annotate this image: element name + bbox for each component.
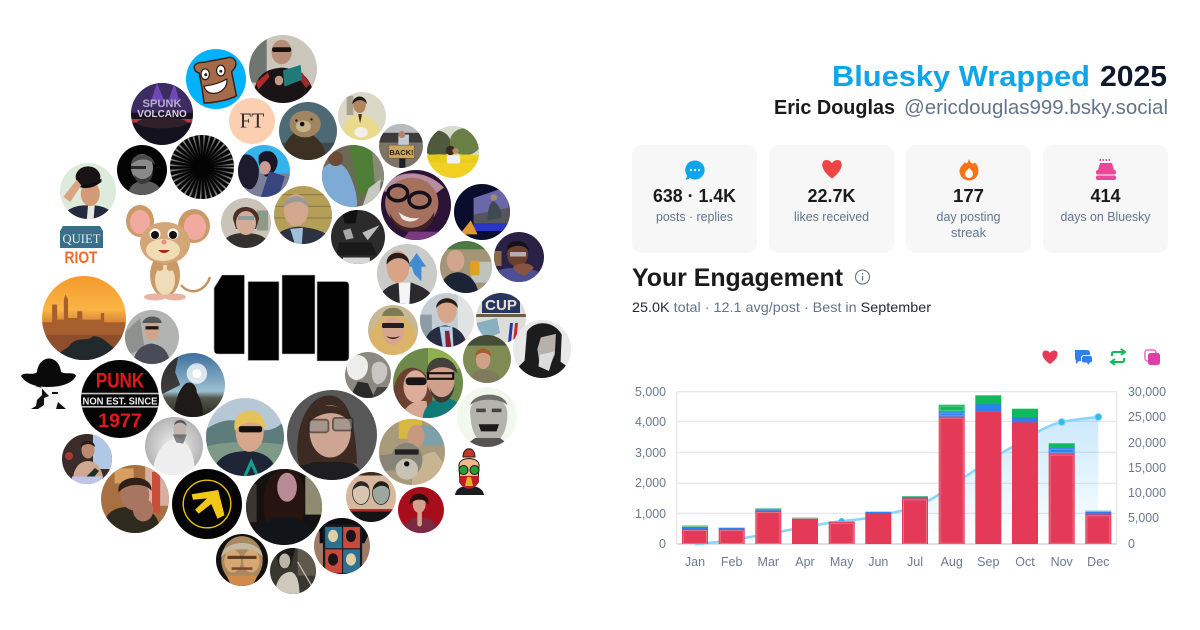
avatar: Punk badge: 1977	[98, 410, 142, 432]
icon: reposts arrows	[1111, 349, 1125, 365]
avatar: black starburst	[170, 135, 234, 199]
panel: stat posts and replies: 638 · 1.4K	[653, 186, 736, 206]
y axis left: 2,000	[635, 476, 666, 490]
heading: Bluesky Wrapped 2025: 2025	[1100, 61, 1167, 93]
avatar: shirt with portraits	[314, 518, 370, 574]
avatar: laughing curly-haired man	[101, 465, 169, 533]
x axis months: Feb	[721, 555, 743, 569]
avatar: Punk badge	[81, 360, 159, 438]
panel: avatar cluster	[21, 35, 571, 594]
x axis months: Jan	[685, 555, 705, 569]
avatar: two people on blue	[238, 145, 290, 197]
avatar: man with beer	[440, 241, 492, 293]
avatar: Spunk Volcano band	[131, 83, 193, 145]
y axis right	[1128, 385, 1166, 551]
avatar: man with hat drawing	[21, 358, 76, 409]
cumulative line	[695, 414, 1102, 544]
cumulative area	[695, 417, 1098, 544]
avatar: Quiet Riot logo	[60, 226, 103, 267]
heading: Bluesky Wrapped 2025: Bluesky Wrapped	[832, 61, 1090, 93]
avatar: smiling man with glasses	[381, 170, 451, 240]
bar: October	[1012, 409, 1038, 544]
x axis months: Nov	[1051, 555, 1074, 569]
y axis right: 5,000	[1128, 511, 1159, 525]
avatar: man in black and white	[117, 145, 167, 195]
x axis months	[685, 555, 1109, 569]
y axis right: 0	[1128, 537, 1135, 551]
panel: stat posting streak: 177	[953, 186, 984, 206]
avatar: Spunk Volcano band: VOLCANO	[137, 109, 187, 120]
icon: likes heart	[1042, 350, 1058, 364]
avatar: toast cartoon	[186, 49, 246, 109]
avatar: red masked character	[455, 449, 484, 495]
y axis right: 15,000	[1128, 461, 1166, 475]
avatar: man in white shirt	[145, 417, 203, 475]
panel: stat posting streak	[906, 145, 1031, 253]
panel: stat likes received: likes received	[794, 210, 869, 224]
avatar: Quiet Riot logo: RIOT	[64, 248, 98, 267]
bar: September	[975, 395, 1001, 544]
y axis right: 20,000	[1128, 436, 1166, 450]
avatar: protester with Back sign: BACK!	[389, 148, 413, 157]
bar: June	[865, 511, 891, 544]
avatar: man shouting in black and white	[457, 387, 517, 447]
bar: March	[755, 508, 781, 544]
bar: May	[829, 521, 855, 544]
avatar: man with red tie	[420, 293, 474, 347]
avatar: Aphex Twin logo	[172, 469, 242, 539]
avatar: silhouette with sun	[161, 353, 225, 417]
icon: flame	[960, 159, 978, 180]
avatar: bald man by brick wall	[274, 186, 332, 244]
avatar: sepia woman	[270, 548, 316, 594]
avatar: Spunk Volcano band: SPUNK	[142, 98, 182, 110]
avatar: black flag logo	[214, 275, 349, 361]
icon: quotes squares	[1145, 350, 1160, 365]
avatar: man in yellow robe	[338, 92, 386, 140]
avatar: woman with glasses large	[287, 390, 377, 480]
avatar: protester with Back sign	[379, 124, 423, 168]
y axis right: 30,000	[1128, 385, 1166, 399]
x axis months: Apr	[795, 555, 815, 569]
y axis left	[635, 385, 666, 551]
avatar: FT logo	[229, 98, 275, 144]
avatar: man reading book	[249, 35, 317, 103]
avatar: man in bathtub with bottle	[62, 434, 112, 484]
bar: December	[1085, 510, 1111, 544]
bar: January	[682, 525, 708, 544]
panel: stat posts and replies: posts · replies	[656, 210, 733, 224]
panel: stat likes received	[769, 145, 894, 253]
user name and handle: Eric Douglas	[774, 97, 895, 119]
avatar: CUP poster: CUP	[485, 297, 517, 314]
avatar: hooded bearded man	[513, 320, 571, 378]
bar: July	[902, 496, 928, 544]
engagement summary: 25.0K total · 12.1 avg/post · Best in September	[632, 299, 931, 315]
y axis left: 4,000	[635, 415, 666, 429]
bar: August	[939, 405, 965, 544]
panel: stat posting streak: day posting	[936, 210, 1001, 224]
x axis months: Jun	[868, 555, 888, 569]
panel: stat likes received: 22.7K	[808, 186, 856, 206]
avatar: Punk badge: PUNK	[96, 369, 144, 392]
avatar: mouse cartoon	[126, 205, 210, 300]
avatar: sea otter	[279, 102, 337, 160]
avatar: Quiet Riot logo: QUIET	[62, 231, 101, 246]
avatar: CUP poster	[476, 293, 526, 342]
avatar: blonde with sunglasses	[206, 398, 284, 476]
x axis months: Aug	[941, 555, 963, 569]
avatar: FT logo: FT	[240, 108, 264, 132]
user name and handle	[774, 97, 1168, 119]
avatar: man with hand on chin	[494, 232, 544, 282]
avatar: hands on typewriter	[331, 210, 385, 264]
avatar: city sunset	[42, 276, 126, 360]
avatar: mirrored face	[216, 534, 268, 586]
bar: April	[792, 517, 818, 544]
panel: stat posts and replies	[632, 145, 757, 253]
x axis months: Mar	[758, 555, 779, 569]
panel: stat days on Bluesky	[1043, 145, 1168, 253]
y axis right: 10,000	[1128, 486, 1166, 500]
avatar: blue hoodie by waterfall	[322, 145, 384, 207]
user name and handle: @ericdouglas999.bsky.social	[904, 97, 1168, 119]
bar: November	[1049, 443, 1075, 544]
avatar: woman with glasses	[221, 198, 271, 248]
avatar: man with cap and sunglasses	[125, 310, 179, 364]
avatar: person in yellow field	[427, 126, 479, 178]
x axis months: Dec	[1087, 555, 1109, 569]
avatar: smiling man in suit	[377, 244, 437, 304]
x axis months: Oct	[1015, 555, 1035, 569]
icon: heart	[822, 160, 842, 178]
y axis left: 1,000	[635, 507, 666, 521]
y axis left: 3,000	[635, 446, 666, 460]
chart legend	[1042, 349, 1160, 365]
avatar: boy in field	[463, 335, 511, 383]
panel: stat posting streak: streak	[951, 226, 987, 240]
icon: info	[856, 270, 870, 284]
chart: monthly engagement	[635, 385, 1166, 569]
avatar: speaker on stage	[454, 184, 510, 240]
x axis months: Sep	[977, 555, 999, 569]
avatar: man with Schnauzer	[379, 419, 445, 485]
avatar: woman in tie and red background	[398, 487, 444, 533]
icon: cake	[1096, 159, 1116, 180]
y axis left: 0	[659, 537, 666, 551]
icon: replies bubbles	[1075, 350, 1092, 365]
avatar: couple selfie	[393, 348, 463, 418]
icon: message bubble	[685, 160, 705, 180]
bar: February	[719, 527, 745, 544]
stacked bars	[682, 395, 1111, 544]
avatar: two faces poster	[346, 472, 396, 522]
y axis right: 25,000	[1128, 410, 1166, 424]
panel: stat days on Bluesky: 414	[1090, 186, 1120, 206]
panel: stat days on Bluesky: days on Bluesky	[1060, 210, 1151, 224]
y axis left: 5,000	[635, 385, 666, 399]
avatar: woman with sunglasses and helmet	[368, 305, 418, 355]
x axis months: May	[830, 555, 854, 569]
x axis months: Jul	[907, 555, 923, 569]
avatar: man in bowler hat	[60, 163, 116, 219]
heading: Your Engagement: Your Engagement	[632, 264, 844, 292]
avatar: dark-haired woman	[246, 469, 322, 545]
avatar: vintage black and white couple	[345, 352, 391, 398]
